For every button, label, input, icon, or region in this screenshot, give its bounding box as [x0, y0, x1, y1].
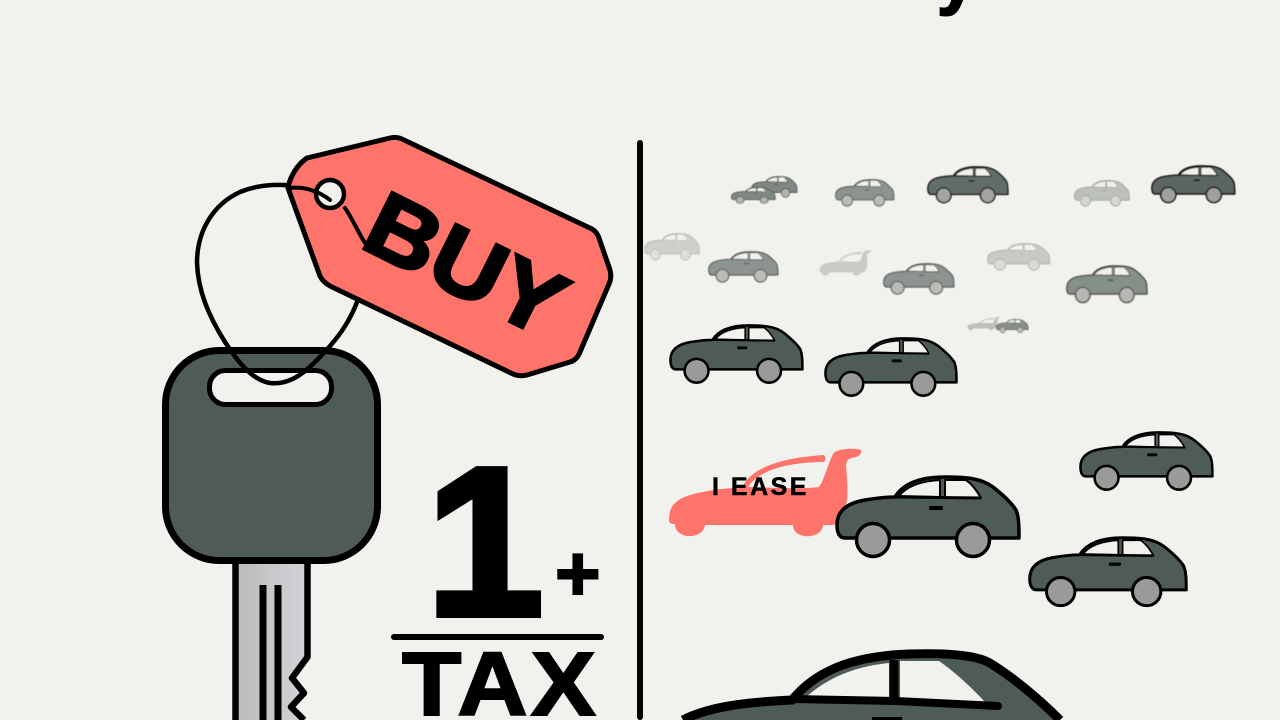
- car crowd: [645, 166, 1235, 720]
- fraction bar: [394, 634, 601, 640]
- car front of lease: [837, 477, 1019, 556]
- car row 1: [836, 166, 1235, 206]
- car right upper: [1080, 432, 1212, 490]
- key slot: [210, 370, 332, 404]
- red lease car: [669, 449, 861, 536]
- cropped large car at bottom: [683, 654, 1060, 720]
- car row 2: [645, 234, 1147, 302]
- car right lower: [1030, 538, 1186, 606]
- tag hole: [316, 180, 344, 208]
- tag text: BUY: [349, 172, 583, 358]
- tiny cars: [967, 317, 1028, 333]
- icon: car key with BUY tag: [166, 137, 611, 720]
- numeral 1: 1: [426, 423, 544, 660]
- red lease car: I EASE: [712, 473, 809, 501]
- distorted small cars: [731, 177, 797, 203]
- key blade: [236, 560, 308, 720]
- key head: [166, 350, 378, 560]
- ring strand through hole: [289, 188, 365, 243]
- price tag: [288, 137, 611, 376]
- divider line: [637, 140, 643, 720]
- key ring: [197, 185, 361, 383]
- plus sign: +: [555, 529, 601, 617]
- large cars: [670, 325, 956, 396]
- one plus tax fraction: [394, 423, 601, 720]
